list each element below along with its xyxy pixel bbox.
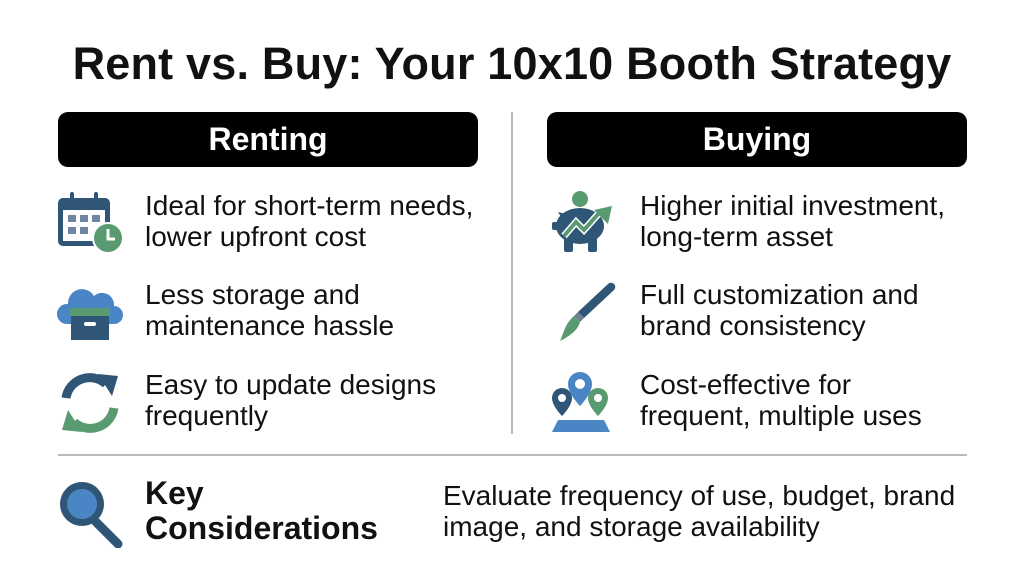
header: renting: Renting [208,121,328,157]
text: renting 2: maintenance hassle [145,310,394,341]
text: key considerations: image, and storage availability [443,511,820,542]
header: buying [547,112,967,167]
text: renting 2: Less storage and [145,279,360,310]
text: buying 1: Higher initial investment, [640,190,945,221]
icon: magnifier [60,482,122,548]
heading: key considerations: Key [145,475,204,511]
text: renting 3: frequently [145,400,268,431]
text: renting 1: Ideal for short-term needs, [145,190,473,221]
heading: key considerations: Considerations [145,510,378,546]
text: buying 3: Cost-effective for [640,369,851,400]
icon: calendar [58,192,122,252]
header: buying: Buying [703,121,811,157]
icon: piggy bank [552,191,612,252]
text: buying 2 [640,279,919,341]
text: buying 2: Full customization and [640,279,919,310]
heading: key considerations [145,475,378,546]
icon: cloud box [57,289,123,340]
text: key considerations: Evaluate frequency of use, budget, brand [443,480,955,511]
text: renting 2 [145,279,394,341]
header: renting [58,112,478,167]
text: buying 3 [640,369,922,431]
text: buying 1 [640,190,945,252]
icon: refresh [62,373,118,433]
text: buying 2: brand consistency [640,310,866,341]
text: buying 3: frequent, multiple uses [640,400,922,431]
text: key considerations [443,480,955,542]
text: renting 1 [145,190,473,252]
text: buying 1: long-term asset [640,221,833,252]
text: renting 3 [145,369,436,431]
text: renting 1: lower upfront cost [145,221,366,252]
text: renting 3: Easy to update designs [145,369,436,400]
icon: map pins [552,372,610,432]
icon: paintbrush [560,282,616,341]
title: Rent vs. Buy: Your 10x10 Booth Strategy [73,38,951,89]
